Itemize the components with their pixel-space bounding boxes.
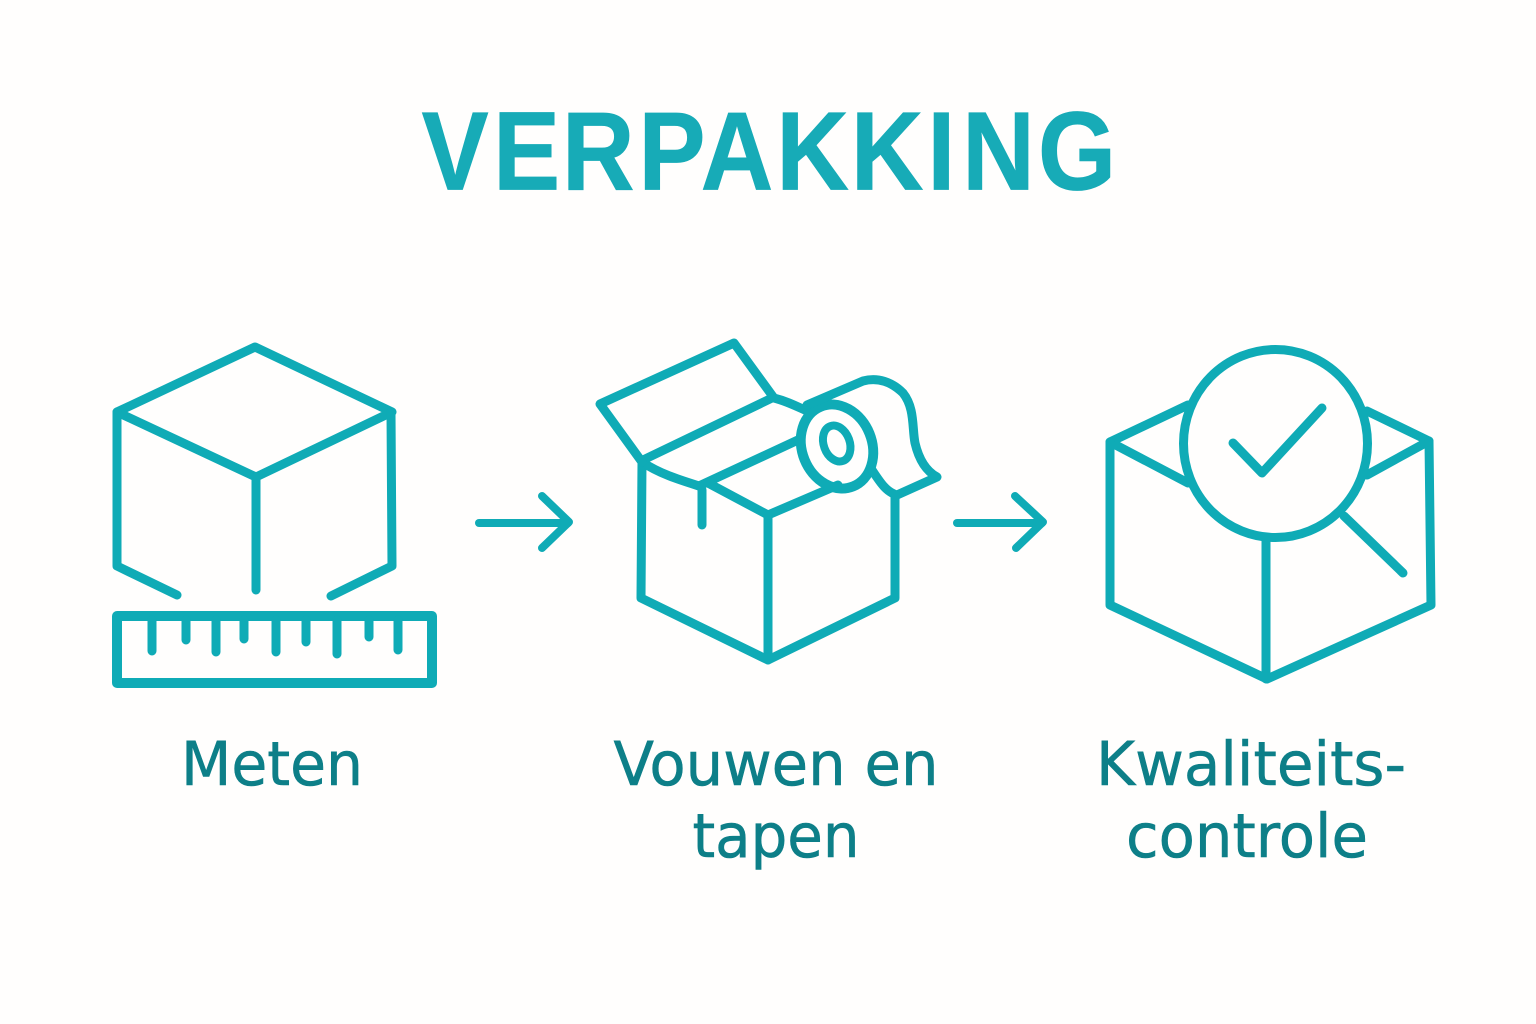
icon: box with ruler <box>117 347 432 683</box>
label: Kwaliteitscontrole: controle <box>1126 801 1368 872</box>
icon: open box with tape roll <box>600 343 937 660</box>
label: Kwaliteitscontrole <box>1096 729 1406 872</box>
label: Vouwen en tapen: Vouwen en <box>614 729 938 800</box>
icon: box with magnifying glass and check <box>1110 350 1431 679</box>
arrow: measure to fold <box>479 496 569 548</box>
label: Vouwen en tapen <box>614 729 938 872</box>
label: Vouwen en tapen: tapen <box>692 801 860 872</box>
arrow: fold to quality control <box>957 496 1043 548</box>
label: Kwaliteitscontrole: Kwaliteits- <box>1096 729 1406 800</box>
title: VERPAKKING <box>422 90 1116 214</box>
label: Meten: Meten <box>181 729 363 800</box>
